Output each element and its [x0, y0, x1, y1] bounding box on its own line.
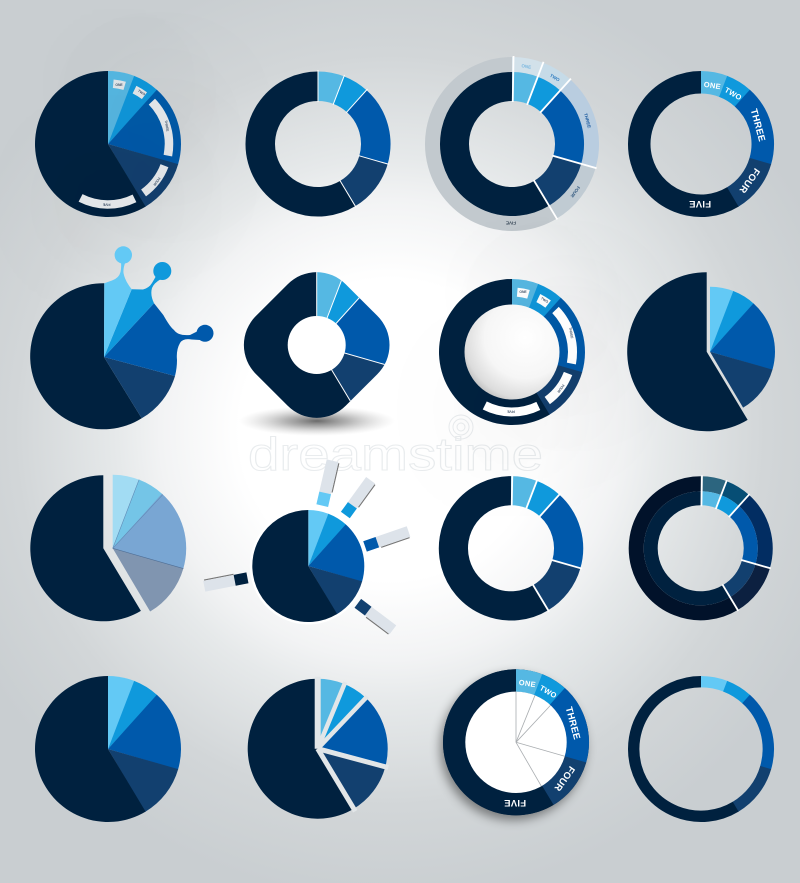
slice three: [113, 494, 186, 569]
slice four: [308, 566, 362, 614]
slice five: [634, 682, 736, 816]
slice one: [318, 679, 343, 749]
label bands: [485, 292, 572, 412]
slice four: [541, 160, 567, 193]
chart: pie with enlarged dark slice, row 2 column 4: [627, 272, 775, 431]
slice three: [746, 699, 768, 768]
slice one: [316, 272, 342, 318]
slice five: [30, 283, 142, 429]
centre hole: [288, 316, 346, 374]
slice four: [318, 749, 385, 809]
band labels: [506, 290, 574, 414]
slice one: [701, 682, 726, 686]
label bands: [81, 84, 169, 205]
chart: two-tone donut, row 3 column 4: [636, 475, 771, 613]
slice one: [516, 681, 539, 685]
slice three: [550, 101, 569, 160]
slice five: [30, 475, 141, 621]
band labels: FIVE: [102, 202, 110, 206]
slice two with droplet: [104, 262, 171, 357]
slice three: [550, 505, 569, 565]
slice four: [547, 759, 575, 795]
slice two: [328, 280, 360, 324]
bar three: [363, 526, 411, 553]
slice one: [113, 475, 140, 548]
bar one: [316, 459, 340, 507]
band labels: FOUR: [556, 383, 565, 394]
slice one: [108, 676, 135, 749]
watermark: [248, 415, 543, 480]
slice two: [725, 686, 746, 699]
slice three: [557, 696, 578, 760]
slice three with droplet: [104, 303, 214, 376]
slice three: [710, 303, 775, 370]
slice five: [260, 86, 348, 202]
ring labels: FOUR: [551, 764, 577, 793]
band labels: TWO: [137, 89, 146, 97]
slice five: [453, 491, 541, 606]
ground shadow: [239, 406, 395, 436]
band labels: ONE: [115, 83, 123, 87]
slice two: [533, 90, 551, 102]
ring labels: TWO: [723, 85, 743, 102]
slice two: [108, 76, 157, 144]
band labels: FOUR: [152, 176, 161, 187]
slice five: [439, 279, 550, 425]
slice four: [347, 160, 374, 194]
slice one: [512, 279, 539, 352]
ring labels: ONE: [518, 678, 536, 689]
ring labels: FOUR: [736, 166, 762, 195]
slice five: [35, 676, 146, 822]
ring labels: FIVE: [504, 797, 526, 808]
chart: donut with white gaps, row 3 column 3: [453, 474, 582, 612]
slice one: [308, 510, 329, 566]
slice five: [244, 272, 350, 418]
slice three: [357, 101, 376, 160]
outer ring labels: FOUR: [569, 185, 581, 199]
slice two: [532, 495, 550, 506]
slice two: [113, 480, 162, 548]
slice five: [35, 71, 146, 217]
slice one: [701, 82, 724, 87]
slice two: [723, 86, 743, 98]
chart: thin ring, row 4 column 4: [634, 682, 768, 816]
chart: splash pie with droplets, row 2 column 1: [30, 246, 214, 429]
slice four: [735, 768, 766, 807]
slice four: [732, 161, 760, 197]
slice three: [742, 98, 763, 161]
slice four: [113, 548, 183, 612]
slice four: [710, 352, 772, 408]
spokes: [516, 692, 565, 786]
bar five: [203, 571, 248, 592]
slice one with droplet: [104, 246, 132, 357]
slice one: [710, 287, 734, 352]
ring labels: THREE: [748, 108, 767, 143]
slice two: [318, 683, 365, 749]
outer tone: [636, 484, 765, 613]
outer ring labels: [506, 63, 592, 226]
band labels: THREE: [164, 120, 170, 133]
ring labels: FIVE: [689, 198, 711, 209]
slice three: [336, 298, 390, 365]
slice five: [248, 679, 354, 819]
bar four: [354, 599, 396, 635]
outer ring labels: ONE: [521, 63, 532, 70]
ring labels: TWO: [538, 683, 558, 700]
chart: plain pie, row 4 column 1: [35, 676, 181, 822]
chart: ring with white disc and spokes, row 4 column 3: [443, 669, 589, 815]
white disc: [465, 692, 567, 793]
outer ring labels: TWO: [549, 73, 561, 83]
chart: ring with curved labels, row 1 column 4: [639, 80, 767, 209]
outer ring labels: FIVE: [506, 220, 516, 226]
white halo: [250, 508, 367, 624]
slice three: [512, 298, 585, 373]
chart: exploded pale pie, row 3 column 1: [30, 475, 186, 621]
slice four: [540, 564, 566, 598]
slice five enlarged: [627, 272, 748, 431]
outer ring: [433, 64, 591, 223]
slice three: [308, 524, 364, 582]
slice two: [538, 685, 558, 697]
slice two: [308, 514, 346, 566]
slice two: [512, 284, 561, 352]
drop shadow: [443, 669, 589, 815]
slice one: [318, 86, 339, 90]
ring labels: ONE: [703, 80, 721, 91]
band labels: FIVE: [506, 410, 515, 414]
outer ring labels: THREE: [583, 113, 592, 129]
band labels: TWO: [540, 296, 549, 304]
chart: donut, row 1 column 2: [260, 70, 389, 207]
ring labels: [504, 678, 582, 808]
band labels: [102, 83, 170, 206]
ring labels: THREE: [563, 706, 582, 741]
slice one: [108, 71, 135, 144]
slice three: [318, 697, 388, 768]
slice one: [511, 491, 532, 495]
slice five: [252, 510, 337, 622]
band labels: ONE: [519, 290, 527, 294]
slice four: [104, 357, 175, 418]
sphere: [464, 304, 560, 400]
chart: pie with wide separated slices, row 4 column 2: [248, 677, 388, 819]
ring labels: [689, 80, 767, 209]
chart: pie with radial bars, row 3 column 2: [203, 459, 411, 635]
slice five: [455, 86, 542, 202]
slice four: [512, 352, 582, 415]
slice five: [454, 681, 548, 804]
slice four: [108, 749, 178, 812]
bar two: [341, 477, 376, 519]
inner tone: [651, 498, 751, 598]
slice four: [108, 144, 178, 207]
chart: pie with label bands, row 1 column 1: [35, 71, 181, 217]
slice three: [108, 695, 181, 770]
chart: ring with sphere centre and label bands, row 2 column 3: [439, 279, 585, 425]
slice two: [339, 90, 357, 101]
band labels: THREE: [568, 327, 574, 340]
chart: rounded diamond donut with shadow, row 2 column 2: [244, 272, 390, 434]
slice two: [710, 291, 754, 352]
watermark: dreamstime: [248, 428, 543, 480]
chart: double ring donut with outer labels, row 1 column 3: [433, 56, 597, 226]
slice two: [108, 681, 157, 749]
slice four: [332, 354, 385, 402]
slice one: [512, 86, 533, 90]
slice three: [108, 90, 181, 165]
slice five: [639, 82, 733, 206]
